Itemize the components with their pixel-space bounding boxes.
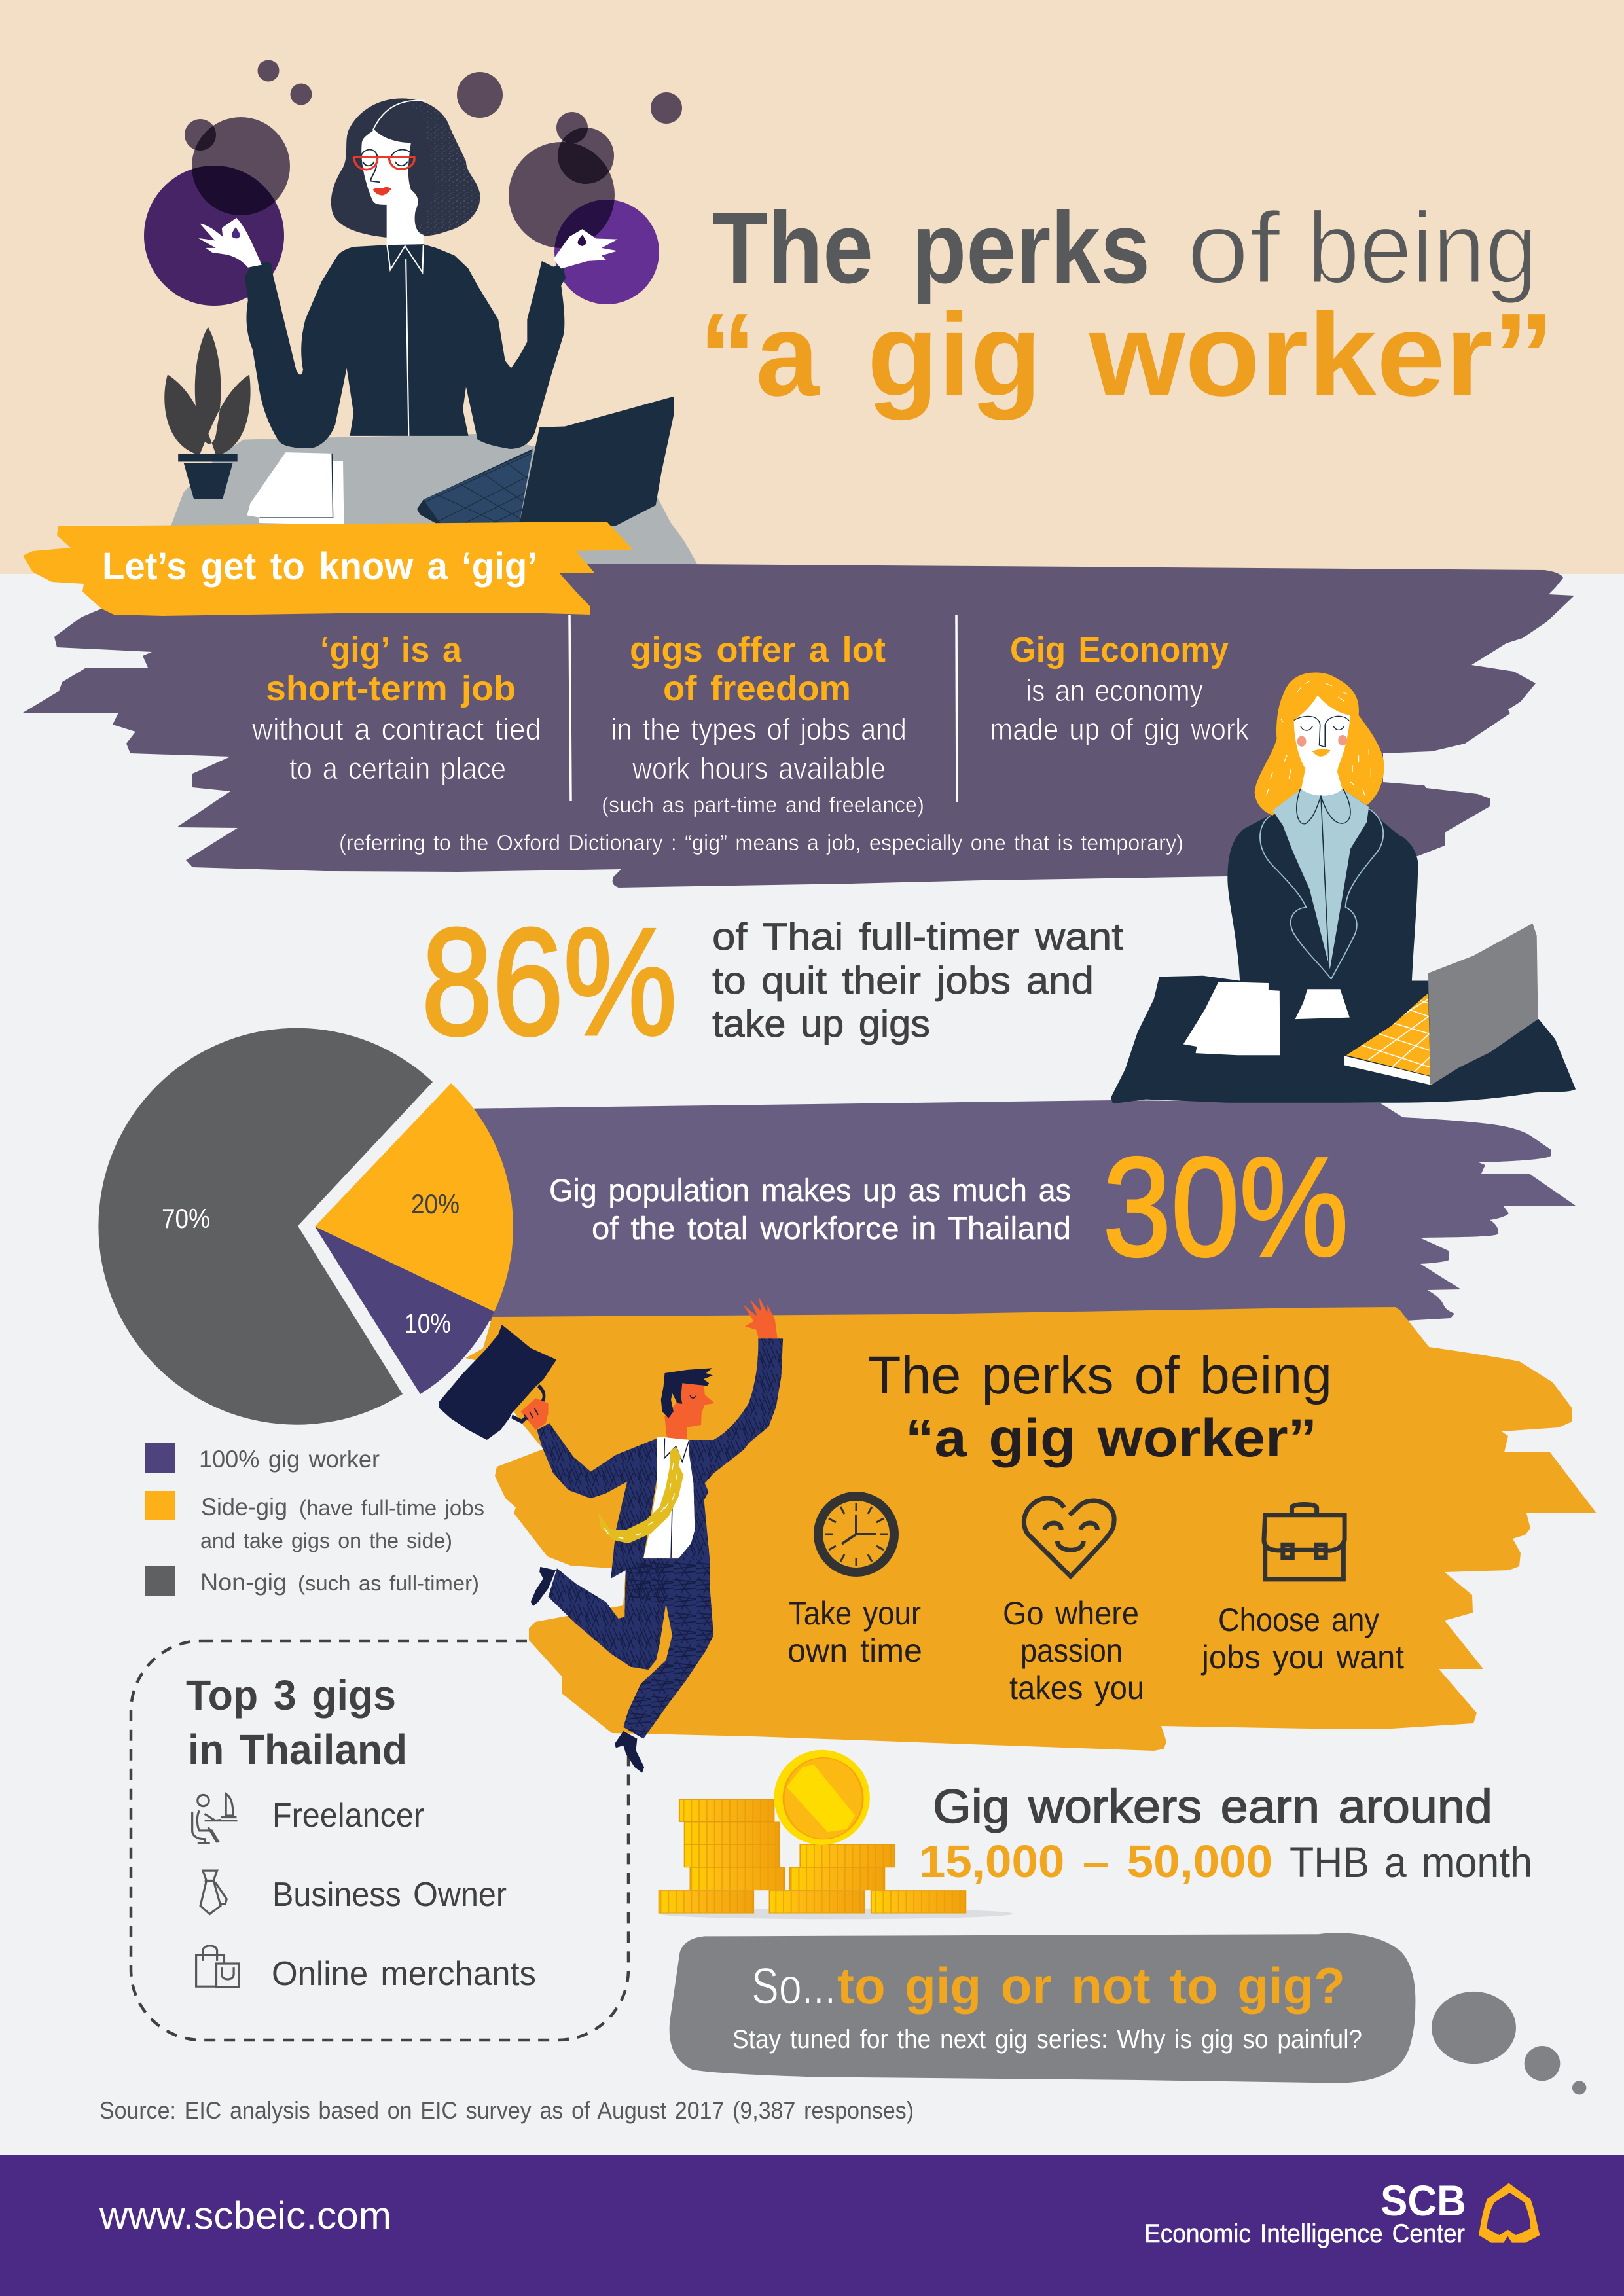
statistic: 86 percent — [422, 897, 1123, 1067]
desk — [1111, 976, 1576, 1103]
left hand — [198, 218, 262, 268]
title: The — [712, 191, 873, 304]
legend: 100% gig worker — [199, 1446, 380, 1473]
statistic: 86 percent: 86% — [422, 897, 677, 1067]
column: gig economy: is an economy — [1026, 673, 1203, 708]
column: gig economy: made up of gig work — [990, 712, 1250, 746]
panel: earnings — [659, 1750, 1532, 1919]
title — [699, 191, 1555, 421]
earnings text: THB a month — [1290, 1838, 1532, 1886]
source note: Source: EIC analysis based on EIC survey as of August 2017 (9,387 responses) — [99, 2097, 914, 2124]
column: gig economy — [990, 630, 1250, 746]
footnote: Oxford definition: (referring to the Oxford Dictionary : “gig” means a job, especially one that is temporary) — [339, 831, 1183, 855]
icon: stack of gold coins — [659, 1750, 1013, 1919]
woman figure and desk — [164, 98, 702, 589]
column: short-term job: without a contract tied — [251, 712, 541, 746]
pie labels — [162, 1189, 460, 1338]
lips — [373, 187, 391, 196]
heading: Top 3 gigs — [186, 1672, 396, 1719]
column: short-term job — [251, 630, 541, 785]
column: freedom: work hours available — [632, 751, 886, 785]
papers — [1183, 982, 1350, 1055]
brand name: Economic Intelligence Center — [1144, 2219, 1465, 2248]
dividers — [569, 615, 571, 801]
background: light page — [0, 574, 1624, 2155]
icon: smiling heart — [1024, 1498, 1114, 1576]
legend: Non-gig — [200, 1569, 287, 1596]
bubble text: Stay tuned for the next gig series: Why is gig so painful? — [732, 2025, 1362, 2054]
panel: top 3 gigs in Thailand — [131, 1641, 628, 2040]
tie stitches — [605, 1463, 677, 1539]
bubble text: So... — [751, 1957, 836, 2015]
raised hand — [743, 1297, 778, 1338]
title: worker” — [1089, 289, 1555, 421]
jacket left — [537, 1423, 657, 1579]
heading: “a gig worker” — [905, 1408, 1317, 1468]
panel: 30 percent band — [458, 1100, 1576, 1321]
perk: choose any jobs you want: jobs you want — [1200, 1639, 1404, 1676]
panel: 30 percent band: of the total workforce in Thailand — [592, 1211, 1071, 1246]
briefcase — [439, 1325, 556, 1440]
dashed frame — [131, 1641, 628, 2040]
website: www.scbeic.com — [99, 2195, 391, 2237]
perk: go where passion takes you: passion — [1020, 1632, 1123, 1669]
panel: perks of being a gig worker — [465, 1307, 1597, 1751]
column: freedom: (such as part-time and freelance) — [602, 793, 924, 817]
legend: (such as full-timer) — [298, 1571, 479, 1595]
collar — [664, 1438, 689, 1462]
back shoe — [531, 1567, 556, 1606]
hair texture — [408, 101, 480, 236]
perk: go where passion takes you: takes you — [1009, 1670, 1144, 1706]
statistic: 86 percent: take up gigs — [712, 1003, 930, 1045]
footer — [0, 2155, 1624, 2296]
column: short-term job: to a certain place — [289, 751, 506, 785]
icon: shopping bags — [196, 1946, 239, 1987]
bubble text: to gig or not to gig? — [837, 1957, 1345, 2015]
column: freedom: gigs offer a lot — [630, 630, 886, 670]
earnings text — [919, 1781, 1532, 1887]
neck — [664, 1416, 687, 1445]
list labels: Online merchants — [272, 1955, 536, 1993]
hair — [661, 1368, 713, 1418]
glasses — [353, 157, 414, 170]
title: of — [1187, 191, 1281, 304]
front leg — [623, 1558, 713, 1739]
illustration: blonde woman at desk — [1111, 673, 1576, 1103]
head — [664, 1383, 715, 1430]
icon: SCB logo — [1479, 2183, 1540, 2243]
slice: non-gig 70% — [98, 1028, 433, 1425]
necktie — [598, 1446, 683, 1543]
illustration: meditating woman at desk — [144, 60, 702, 589]
eyes and nose — [1294, 716, 1350, 753]
title: “a — [699, 289, 820, 421]
pie labels: 20% — [411, 1189, 460, 1219]
statistic: 86 percent: to quit their jobs and — [712, 960, 1094, 1002]
back leg — [549, 1558, 666, 1670]
desk — [166, 434, 702, 589]
eyes and nose — [361, 150, 413, 182]
legend — [145, 1443, 484, 1596]
banner: let's get to know a gig: Let’s get to know a ‘gig’ — [102, 545, 537, 588]
column: gig economy: Gig Economy — [1010, 630, 1229, 670]
pie labels: 70% — [162, 1203, 210, 1234]
statistic: 86 percent: of Thai full-timer want — [712, 916, 1123, 958]
earnings text: 15,000 – 50,000 — [919, 1836, 1272, 1887]
perk: choose any jobs you want — [1200, 1505, 1404, 1676]
legend: Side-gig — [201, 1494, 287, 1520]
jacket — [1227, 807, 1418, 980]
body — [245, 244, 566, 449]
panel: what is a gig — [23, 564, 1574, 888]
collar — [387, 245, 424, 436]
column: freedom: of freedom — [663, 669, 851, 708]
bubble text — [732, 1957, 1362, 2054]
slice: full gig 10% — [315, 1227, 494, 1394]
perk: take your own time: own time — [787, 1632, 922, 1669]
title: perks — [912, 191, 1150, 304]
right hand — [553, 229, 618, 268]
heading — [186, 1672, 407, 1773]
icon: necktie — [200, 1871, 226, 1914]
mouth — [1312, 749, 1330, 757]
icon: briefcase — [1264, 1505, 1344, 1579]
plant — [164, 327, 251, 499]
brand name — [1144, 2176, 1466, 2248]
pie labels: 10% — [405, 1308, 451, 1338]
face and neck — [361, 130, 424, 246]
title: being — [1307, 191, 1538, 304]
shirt — [1272, 789, 1369, 969]
callout: thought bubble — [670, 1933, 1586, 2094]
list labels: Freelancer — [272, 1797, 424, 1835]
column: freedom: in the types of jobs and — [611, 712, 907, 746]
papers — [247, 452, 344, 525]
perk: take your own time: Take your — [789, 1595, 921, 1632]
heading — [868, 1346, 1332, 1468]
perk: go where passion takes you: Go where — [1003, 1595, 1139, 1632]
laptop — [1343, 924, 1538, 1085]
jacket right — [677, 1338, 783, 1560]
perk: go where passion takes you — [1003, 1498, 1144, 1706]
banner: let's get to know a gig — [23, 522, 633, 616]
cheeks — [1297, 736, 1306, 747]
face — [1294, 695, 1350, 800]
title: gig — [867, 289, 1041, 421]
earnings text: Gig workers earn around — [933, 1781, 1492, 1833]
hair — [1255, 673, 1384, 816]
heading: in Thailand — [188, 1726, 407, 1773]
big number: 30% — [1103, 1128, 1348, 1285]
list labels: Business Owner — [272, 1876, 507, 1914]
front shoe — [615, 1731, 644, 1773]
slice: side-gig 20% — [315, 1083, 513, 1312]
laptop — [413, 397, 674, 526]
list labels — [272, 1797, 536, 1993]
illustration: jumping businessman — [439, 1297, 783, 1773]
column: short-term job: ‘gig’ is a — [320, 630, 462, 670]
legend: and take gigs on the side) — [200, 1529, 452, 1552]
thought circles — [144, 60, 682, 306]
column: short-term job: short-term job — [266, 669, 516, 708]
eye — [690, 1395, 696, 1398]
heading: The perks of being — [868, 1346, 1332, 1405]
band text: Gig population makes up as much as — [549, 1174, 1071, 1208]
column: freedom — [602, 630, 924, 817]
pie chart — [98, 1028, 513, 1425]
hair — [331, 98, 480, 238]
left hand — [520, 1398, 549, 1430]
brand name: SCB — [1380, 2176, 1466, 2225]
headband — [373, 100, 425, 130]
collar and lapels — [1297, 789, 1350, 969]
icon: clock — [818, 1496, 894, 1572]
icon: freelancer at desk — [192, 1794, 238, 1843]
upright coin — [774, 1750, 870, 1845]
orange brush shape — [465, 1307, 1597, 1751]
shirt — [643, 1437, 695, 1558]
legend: (have full-time jobs — [299, 1496, 484, 1520]
background: cream header — [0, 0, 1624, 574]
perk: take your own time — [787, 1496, 922, 1669]
hair strands — [1267, 681, 1371, 795]
brush shape — [23, 564, 1574, 888]
perk: choose any jobs you want: Choose any — [1218, 1602, 1379, 1638]
